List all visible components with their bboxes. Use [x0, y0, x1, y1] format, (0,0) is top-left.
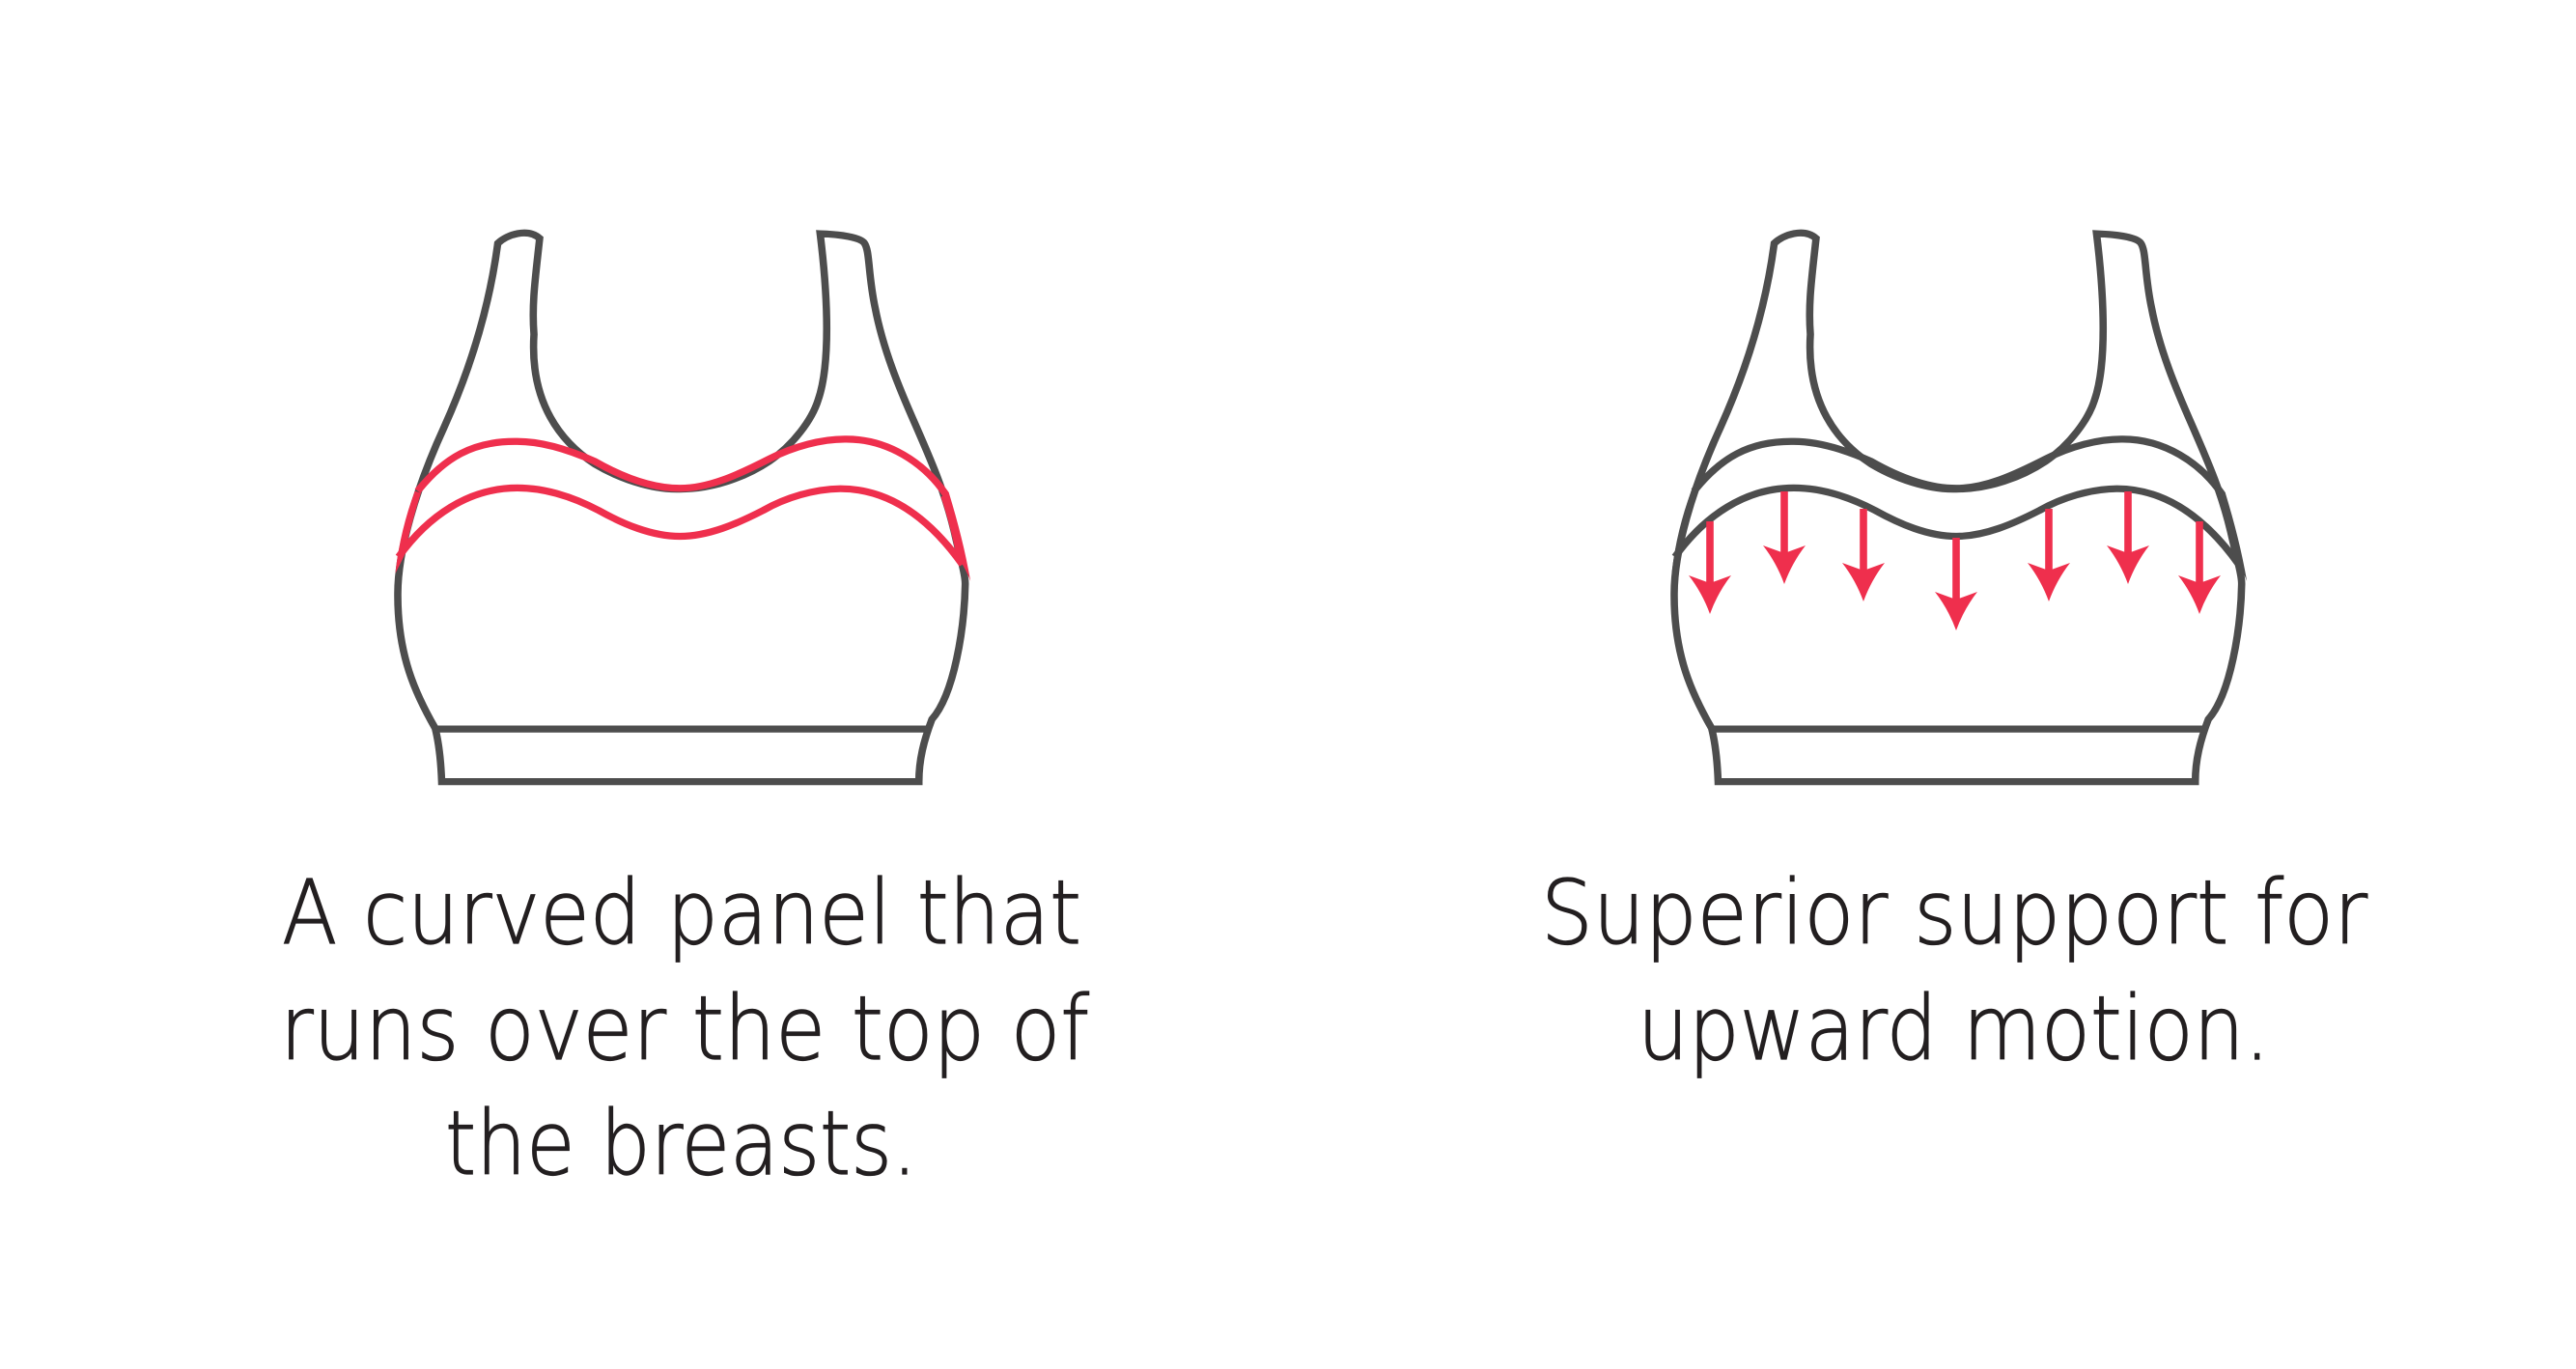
caption: curved panel: A curved panel that	[282, 861, 1081, 964]
panel: curved panel	[280, 233, 1090, 1195]
caption: curved panel: runs over the top of	[280, 977, 1090, 1080]
illustration: bra with highlighted curved panel	[395, 233, 970, 782]
caption: curved panel: the breasts.	[445, 1092, 917, 1195]
caption: superior support	[1541, 861, 2367, 1080]
caption: superior support: Superior support for	[1541, 861, 2367, 964]
illustration: bra outline	[1671, 233, 2247, 782]
caption: superior support: upward motion.	[1638, 977, 2270, 1080]
caption: curved panel	[280, 861, 1090, 1195]
arrows: downward force	[1689, 491, 2221, 630]
panel: superior support	[1541, 233, 2367, 1080]
